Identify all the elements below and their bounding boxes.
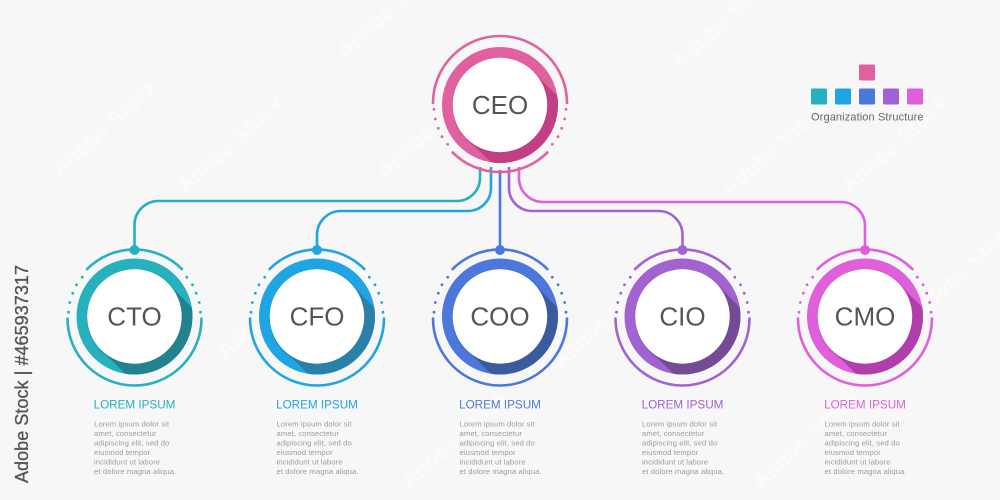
CTO dots (67, 276, 202, 314)
CFO label: CFO (290, 302, 344, 332)
CIO description: incididunt ut labore (642, 458, 708, 466)
legend caption: Organization Structure (811, 112, 924, 124)
CMO description: Lorem ipsum dolor sit (824, 420, 900, 428)
CFO description (276, 420, 359, 476)
CMO ring (807, 258, 923, 374)
CTO arcs (68, 249, 202, 386)
CFO description: et dolore magna aliqua. (276, 467, 359, 476)
watermark pattern: Adobe Stock (717, 93, 834, 202)
CTO description (94, 420, 176, 476)
CTO description: eiusmod tempor (94, 448, 151, 457)
text block: CMO (824, 398, 907, 476)
CMO long shadow (866, 318, 915, 366)
CEO label: CEO (472, 90, 528, 120)
watermark pattern: Adobe Stock (47, 73, 164, 182)
CFO description: incididunt ut labore (276, 458, 343, 466)
CMO dots (798, 276, 932, 314)
watermark pattern: Adobe Stock (212, 255, 329, 364)
text block: CTO (94, 398, 176, 476)
CIO heading: LOREM IPSUM (642, 398, 723, 412)
COO description: eiusmod tempor (460, 448, 516, 457)
CTO heading: LOREM IPSUM (94, 398, 175, 412)
CIO junction dot (678, 245, 688, 255)
CFO description: adipiscing elit, sed do (276, 438, 352, 448)
COO description: amet, consectetur (460, 429, 522, 438)
CIO dots (615, 276, 750, 314)
CFO dots (250, 276, 384, 314)
watermark pattern: Adobe Stock (837, 90, 954, 199)
CMO junction dot (860, 245, 870, 255)
CTO description: incididunt ut labore (94, 458, 160, 466)
CTO ring (76, 258, 192, 374)
connector: CEO to COO (499, 170, 501, 250)
CFO junction dot (312, 245, 322, 255)
CFO description: Lorem ipsum dolor sit (276, 420, 352, 428)
CEO inner disc (453, 58, 547, 152)
watermark pattern: Adobe Stock (397, 385, 514, 494)
CMO description: adipiscing elit, sed do (824, 438, 900, 448)
CFO inner disc (270, 269, 364, 364)
CFO description: amet, consectetur (276, 429, 339, 438)
CMO description (824, 420, 907, 476)
watermark pattern: Adobe Stock (747, 385, 864, 494)
COO arcs (433, 249, 567, 386)
CIO long shadow (684, 318, 732, 366)
COO label: COO (470, 302, 530, 332)
connector: CEO to CFO (317, 167, 491, 250)
watermark pattern: Adobe Stock (547, 265, 664, 374)
legend: organization structure (811, 64, 924, 124)
stock id vertical text: Adobe Stock | #465937317 (12, 265, 32, 483)
node: CIO (615, 245, 750, 386)
CIO arcs (616, 249, 750, 386)
CIO description: adipiscing elit, sed do (642, 438, 717, 448)
CTO description: et dolore magna aliqua. (94, 467, 176, 476)
CEO outer arcs (433, 36, 567, 172)
CIO description: eiusmod tempor (642, 448, 699, 457)
CMO description: eiusmod tempor (824, 448, 881, 457)
COO ring (442, 258, 558, 374)
node: CFO (250, 245, 384, 386)
COO inner disc (453, 269, 547, 364)
COO description: Lorem ipsum dolor sit (460, 420, 535, 428)
CTO description: adipiscing elit, sed do (94, 438, 169, 448)
CFO ring (259, 258, 375, 374)
CIO description: et dolore magna aliqua. (642, 467, 724, 476)
text block: COO (459, 398, 542, 476)
CMO label: CMO (835, 302, 895, 332)
CFO heading: LOREM IPSUM (276, 398, 358, 412)
COO dots (433, 276, 567, 314)
CIO description (642, 420, 724, 476)
CEO ring (442, 47, 558, 163)
COO heading: LOREM IPSUM (459, 398, 541, 412)
CMO heading: LOREM IPSUM (824, 398, 906, 412)
CMO description: incididunt ut labore (824, 458, 891, 466)
CTO label: CTO (107, 302, 162, 332)
CMO arcs (798, 249, 932, 386)
node: COO (433, 245, 567, 386)
COO description: et dolore magna aliqua. (460, 467, 542, 476)
watermark pattern: Adobe Stock (172, 90, 289, 199)
CIO ring (624, 258, 740, 374)
CTO long shadow (136, 318, 184, 366)
node: CEO (433, 36, 567, 172)
CEO long shadow (501, 106, 550, 155)
node: CMO (798, 245, 932, 386)
CTO description: amet, consectetur (94, 429, 157, 438)
CEO dots (433, 108, 567, 146)
node: CTO (67, 245, 202, 386)
text block: CFO (276, 398, 359, 476)
COO description (460, 420, 542, 476)
legend squares (811, 64, 923, 104)
CTO junction dot (130, 245, 140, 255)
text block: CIO (642, 398, 724, 476)
CFO long shadow (318, 318, 367, 366)
CFO description: eiusmod tempor (276, 448, 333, 457)
connector: CEO to CMO (519, 167, 865, 250)
COO description: incididunt ut labore (460, 458, 526, 466)
COO junction dot (495, 245, 505, 255)
CTO description: Lorem ipsum dolor sit (94, 420, 170, 428)
CIO inner disc (635, 269, 730, 364)
CMO description: et dolore magna aliqua. (824, 467, 907, 476)
CIO label: CIO (659, 302, 706, 332)
COO description: adipiscing elit, sed do (460, 438, 535, 448)
connector: CEO to CIO (509, 167, 682, 250)
CIO description: Lorem ipsum dolor sit (642, 420, 718, 428)
CMO inner disc (818, 269, 912, 364)
watermark pattern: Adobe Stock (372, 75, 489, 184)
connector: CEO to CTO (134, 167, 480, 250)
CTO inner disc (87, 269, 182, 364)
CFO arcs (250, 249, 384, 386)
CMO description: amet, consectetur (824, 429, 887, 438)
CIO description: amet, consectetur (642, 429, 705, 438)
COO long shadow (501, 318, 550, 366)
